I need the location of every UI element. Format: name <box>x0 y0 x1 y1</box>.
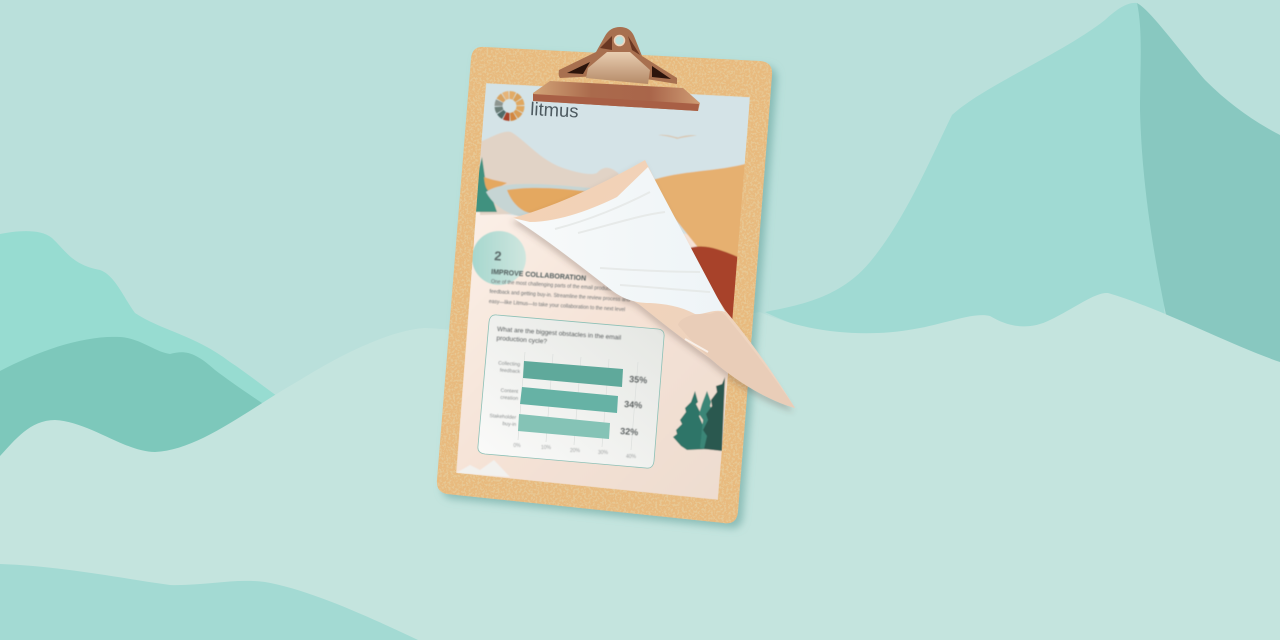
paper river <box>486 184 590 216</box>
logo wordmark: litmus <box>530 98 579 122</box>
bar values: 34% <box>624 399 643 410</box>
chart grid lines <box>518 352 638 450</box>
axis labels: 0% <box>513 443 521 449</box>
paper lower background <box>456 211 740 500</box>
curl: highlight streak <box>685 339 708 352</box>
curl: white sheet <box>513 167 725 314</box>
axis labels <box>513 443 637 460</box>
clip highlight <box>586 52 650 84</box>
clip dark cutouts <box>567 62 590 74</box>
clip handle <box>559 27 677 84</box>
bar values: 32% <box>620 426 639 437</box>
clipboard board <box>437 47 772 523</box>
axis labels: 40% <box>626 454 637 460</box>
paper: trees <box>673 377 725 451</box>
body paragraph <box>489 279 631 314</box>
bar: content creation <box>520 387 618 413</box>
paper orange sliver <box>484 177 507 192</box>
bar: stakeholder buy-in <box>518 414 610 439</box>
section heading <box>491 248 588 283</box>
paper orange hill: right <box>654 164 745 258</box>
bar labels <box>489 360 521 428</box>
paper orange lake <box>507 188 592 214</box>
chart question <box>496 326 622 351</box>
axis labels: 30% <box>598 450 609 456</box>
section heading: IMPROVE COLLABORATION <box>491 269 586 283</box>
foreground hill <box>0 293 1280 640</box>
mountain: right peak <box>765 3 1280 370</box>
bar labels: creation <box>500 395 518 402</box>
bar values: 35% <box>629 374 648 385</box>
bar: collecting feedback <box>523 361 623 387</box>
curl: darker peach fold <box>678 312 795 408</box>
mountain: left light range <box>0 231 290 480</box>
mountain: left dark range <box>0 337 265 500</box>
axis labels: 20% <box>570 448 581 454</box>
metal clip <box>533 27 700 111</box>
clip base plate <box>533 81 700 111</box>
paper hill: beige <box>480 132 619 216</box>
paper sheet <box>456 83 752 500</box>
paper sky <box>474 83 750 241</box>
axis labels: 10% <box>541 445 552 451</box>
paper: bird <box>658 135 697 139</box>
curl: peach underside <box>513 160 795 408</box>
bar labels: feedback <box>500 368 521 375</box>
bar labels: buy-in <box>502 421 516 428</box>
paper red hill <box>690 246 738 319</box>
section heading: 2 <box>494 248 502 264</box>
logo <box>494 91 579 122</box>
chart card <box>478 315 664 468</box>
paper: snowy corner peaks <box>456 460 510 477</box>
bar labels: Collecting <box>498 360 520 368</box>
body paragraph: feedback and getting buy-in. Streamline the review process and <box>489 289 631 304</box>
bar values <box>620 374 648 437</box>
paper number circle <box>472 231 526 285</box>
logo wheel <box>494 91 525 121</box>
paper teal block <box>476 157 498 213</box>
page curl <box>513 160 795 408</box>
body paragraph: easy—like Litmus—to take your collaboration to the next level <box>489 299 625 313</box>
hill: bottom-left <box>0 564 418 640</box>
clip hole <box>614 36 624 46</box>
chart question: production cycle? <box>496 335 548 346</box>
bar labels: Content <box>500 388 519 395</box>
chart question: What are the biggest obstacles in the email <box>497 326 622 342</box>
body paragraph: One of the most challenging parts of the email production <box>491 279 618 293</box>
curl: crease lines <box>555 192 710 292</box>
bar labels: Stakeholder <box>489 413 517 421</box>
